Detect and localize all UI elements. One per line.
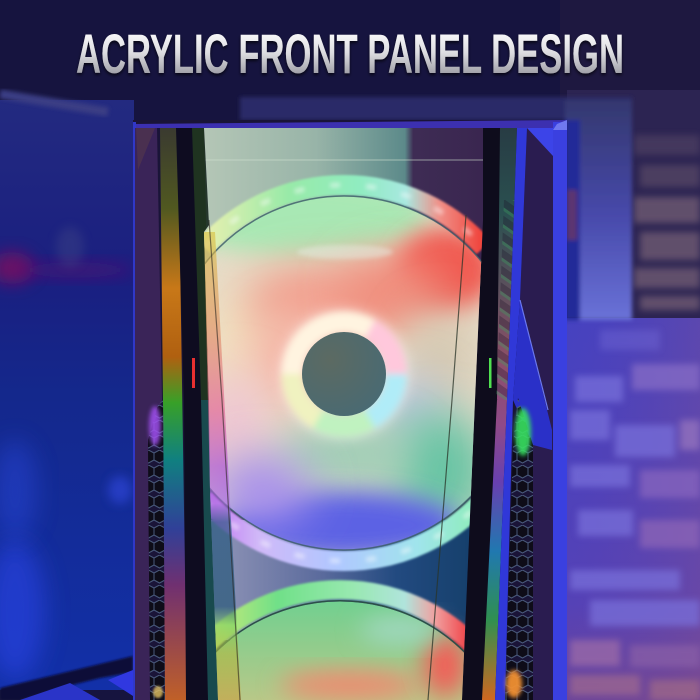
glass edge lines and small LEDs	[192, 215, 492, 700]
right side mesh with green glow	[505, 398, 533, 700]
fan 1 blades	[204, 196, 482, 550]
right side panel	[520, 128, 553, 700]
white shelf behind the case	[240, 97, 632, 320]
fan 1 outer ring bottom	[204, 498, 484, 561]
fan 1 mesh patch	[297, 245, 393, 259]
acrylic left colour strip	[204, 232, 241, 700]
monitor on the left	[0, 94, 135, 700]
fan 2 blades	[216, 602, 464, 700]
acrylic front panel	[204, 128, 483, 700]
fan 1 hub with RGB ring	[276, 306, 412, 442]
fan 1 outer ring top	[204, 185, 484, 248]
left side mesh with purple glow	[148, 400, 165, 700]
fan 2 outer ring	[204, 590, 476, 648]
brick wall on the right	[567, 90, 700, 700]
PC case body	[133, 120, 567, 700]
fan 1 inner ring line	[205, 195, 482, 551]
